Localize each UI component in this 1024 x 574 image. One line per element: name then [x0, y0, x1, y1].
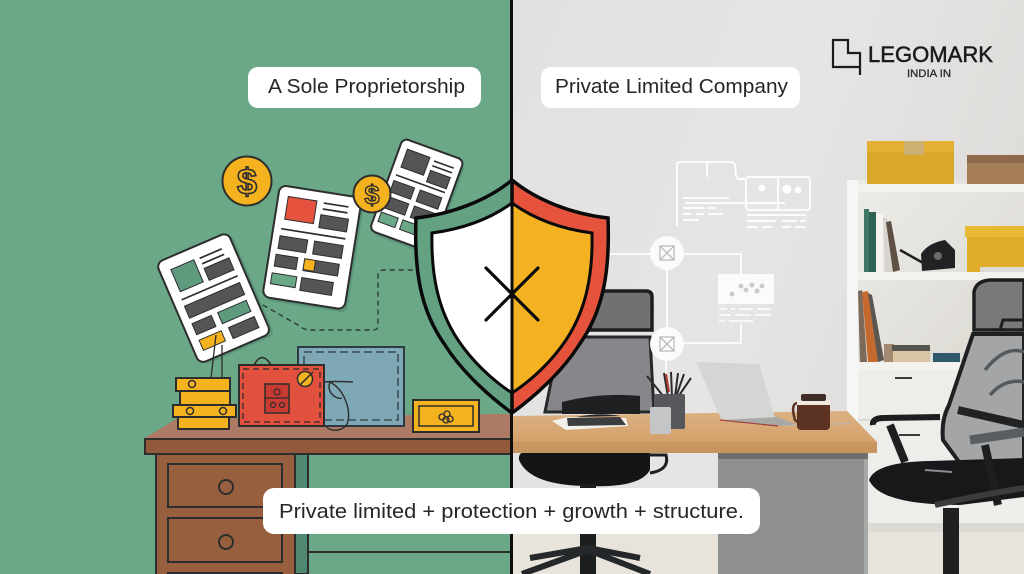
icon: large dollar coin [222, 156, 272, 206]
floor [868, 532, 1024, 574]
logo wordmark: LEGOMARK [868, 42, 993, 67]
icon: gold cash box [413, 400, 479, 432]
shield: left half [416, 180, 512, 413]
icon: large dollar coin: $ [237, 161, 257, 202]
laptop [696, 362, 851, 426]
document: top right sheet [370, 138, 464, 250]
yellow storage box lower [965, 226, 1024, 272]
icon: split shield with X [416, 180, 608, 413]
logo mark [833, 40, 860, 75]
pen cup and jar [647, 372, 691, 434]
caption: bottom tagline [263, 488, 760, 534]
icon: blue folder [298, 347, 404, 426]
white diagram: connectors and nodes [610, 236, 741, 376]
icon: stack of binders [173, 335, 236, 429]
panel: sole proprietorship illustrated side [0, 0, 513, 574]
label: private limited company: Private Limited Company [555, 76, 788, 98]
white diagram: card with dots [718, 274, 774, 321]
panel: private limited company photo side [512, 0, 1024, 574]
icon: cord loop [324, 382, 353, 430]
books: lower shelf [858, 290, 960, 362]
office desk [513, 411, 877, 574]
icon: small dollar coin: $ [364, 180, 380, 210]
dashed connector [263, 270, 416, 330]
document: center sheet [262, 185, 365, 313]
yellow storage box upper [867, 141, 954, 184]
coffee mug [793, 394, 830, 430]
label: private limited company [541, 67, 800, 108]
office chair: behind desk [519, 291, 667, 574]
bookshelf [847, 141, 1024, 531]
camera on shelf [900, 240, 955, 271]
label: a sole proprietorship [248, 67, 481, 108]
white diagram: document tree [677, 162, 810, 227]
center divider line [510, 0, 513, 574]
notebook stack [552, 414, 628, 430]
books: upper shelf [864, 209, 900, 272]
label: a sole proprietorship: A Sole Proprietorship [268, 76, 465, 98]
logo: legomark [833, 40, 993, 75]
brown storage box [967, 155, 1024, 184]
icon: small dollar coin [354, 176, 390, 212]
document: left sheet [156, 231, 275, 367]
logo tagline: INDIA IN [907, 68, 951, 80]
caption: bottom tagline: Private limited + protection + growth + structure. [279, 501, 744, 523]
desk: left illustrated [145, 414, 513, 574]
icon: red wallet [239, 358, 324, 426]
shield: right half [512, 180, 608, 413]
office chair: right foreground [869, 280, 1024, 574]
